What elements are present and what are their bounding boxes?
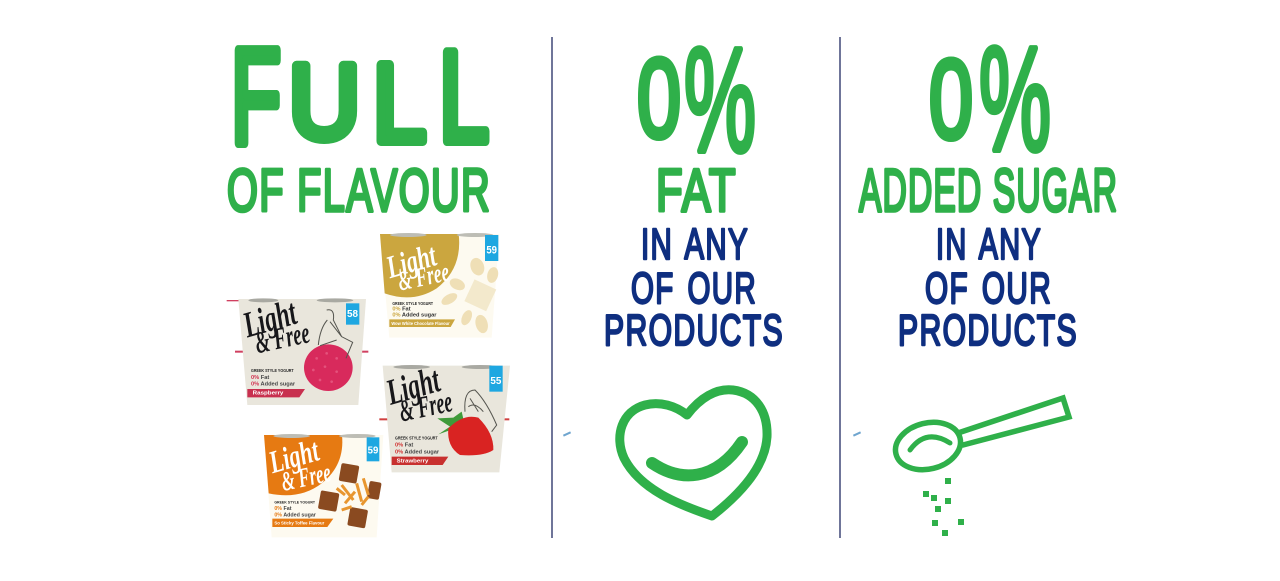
heading: 0%: 0 (929, 37, 973, 162)
tub: strawberry: GREEK STYLE YOGURT (395, 436, 438, 441)
text: in any of our products: IN ANY (641, 220, 749, 269)
heading: 0%: 0 (637, 36, 681, 161)
tub: toffee: & Free (278, 457, 333, 497)
tub: white chocolate: GREEK STYLE YOGURT (392, 301, 433, 306)
tub: raspberry: 58 (347, 309, 358, 320)
tub: strawberry: Light (381, 358, 445, 413)
tub: strawberry (379, 358, 510, 472)
tub: raspberry: 0% Added sugar (251, 382, 296, 388)
panel: zero added sugar (853, 17, 1118, 536)
text: in any of our products: PRODUCTS (604, 306, 784, 355)
text: in any of our products (898, 220, 1078, 355)
heading: 0%: % (979, 17, 1051, 182)
tub: raspberry: & Free (252, 315, 313, 360)
tub: strawberry: Strawberry (397, 458, 428, 464)
tub: raspberry: Light (238, 291, 302, 346)
tub: strawberry: 0% Added sugar (395, 449, 440, 455)
tub: toffee: So Sticky Toffee Flavour (274, 521, 324, 526)
heading: full: U (289, 44, 360, 161)
text: in any of our products: PRODUCTS (898, 306, 1078, 355)
tub: white chocolate: & Free (395, 256, 452, 297)
icon: heart with smile (620, 390, 767, 516)
text: in any of our products: OF OUR (925, 264, 1052, 313)
tub: raspberry: Raspberry (253, 391, 283, 397)
tub: white chocolate: Light (381, 236, 441, 285)
tub: raspberry (227, 291, 368, 405)
tub: strawberry: & Free (396, 384, 455, 429)
tub: toffee: GREEK STYLE YOGURT (274, 500, 315, 505)
text: in any of our products (604, 220, 784, 355)
heading: full: L (439, 25, 489, 169)
icon: spoon with sugar (890, 398, 1069, 536)
tub: white chocolate: 0% Added sugar (392, 313, 437, 319)
tub: toffee: 0% Fat (274, 506, 292, 512)
subheading: of flavour: OF FLAVOUR (227, 157, 491, 224)
tub: toffee: 59 (368, 446, 379, 457)
tub: white chocolate (380, 233, 500, 338)
tub: raspberry: 0% Fat (251, 375, 269, 381)
heading: 0%: % (684, 18, 756, 183)
tub: white chocolate: Wow White Chocolate Flavour (391, 321, 450, 326)
tub: strawberry: 55 (490, 376, 502, 387)
product tubs (227, 233, 510, 537)
heading: full: L (373, 42, 426, 165)
tub: toffee: 0% Added sugar (274, 512, 316, 518)
heading: full: F (231, 21, 281, 172)
heading: fat: FAT (656, 157, 737, 224)
panel: full of flavour (227, 21, 510, 537)
panel: zero fat (563, 18, 784, 516)
tub: raspberry: GREEK STYLE YOGURT (251, 368, 294, 373)
text: in any of our products: IN ANY (936, 220, 1042, 269)
tub: white chocolate: 59 (486, 245, 497, 257)
tub: white chocolate: 0% Fat (392, 306, 411, 312)
text: in any of our products: OF OUR (631, 264, 757, 313)
tub: toffee: Light (264, 431, 323, 480)
tub: toffee (264, 431, 383, 537)
tub: strawberry: 0% Fat (395, 443, 413, 449)
